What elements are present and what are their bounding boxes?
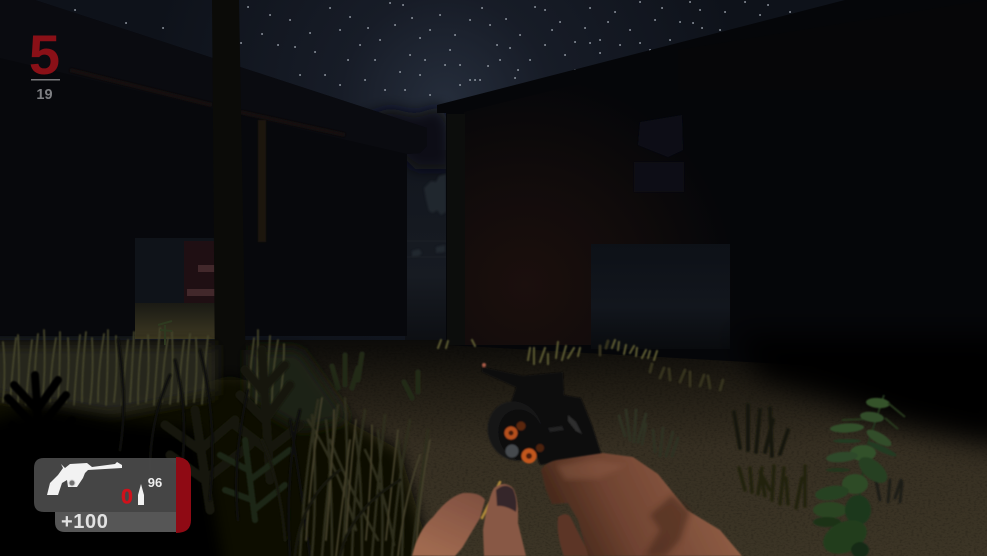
ferns: [0, 350, 300, 520]
icon: revolver: [47, 462, 122, 495]
left hand: [412, 482, 526, 556]
cartridge held: [482, 482, 500, 518]
left dark foliage underlay: [0, 375, 435, 556]
roof beam highlight: [70, 70, 345, 135]
thumb: [483, 484, 526, 556]
score gain: +100: [61, 511, 108, 533]
distant lit grass patches: [332, 340, 723, 398]
reloading clip count: 0: [121, 486, 133, 508]
left building: [0, 0, 427, 339]
shaded bottom-left mass: [0, 405, 225, 556]
foreground utility pole: [212, 0, 246, 380]
dark right ground shadow: [735, 335, 987, 450]
roof: [0, 0, 427, 154]
hanging beam: [258, 120, 266, 242]
background grass on left: [3, 328, 284, 405]
frame: [510, 372, 604, 465]
health bar: [176, 457, 191, 533]
cartridges: [504, 426, 518, 440]
right building: [437, 0, 987, 380]
ground texture: [386, 413, 987, 556]
ground: [0, 340, 987, 556]
right hand: [541, 453, 742, 556]
foreground tall grass: [118, 340, 430, 556]
left building doorway: [135, 238, 217, 339]
back grass glow: [0, 345, 215, 415]
kill counter: [29, 23, 60, 103]
weapon HUD panel: [34, 457, 191, 533]
small fern behind gap: [158, 321, 172, 345]
distant foggy trees: [360, 106, 450, 345]
midground ground tufts: [619, 405, 902, 508]
panel background: [34, 458, 176, 512]
green plant: [813, 395, 905, 556]
barrel: [482, 367, 524, 390]
counter numeral: 5: [29, 23, 60, 86]
night sky: [0, 0, 987, 345]
large doorway: [591, 244, 730, 349]
broken windows: [638, 115, 683, 157]
icon: bullet: [138, 484, 144, 505]
reserve ammo: 96: [148, 475, 162, 490]
revolver: [479, 363, 604, 469]
cylinder: [479, 393, 551, 469]
stars: [75, 2, 790, 100]
total count: 19: [36, 87, 53, 103]
